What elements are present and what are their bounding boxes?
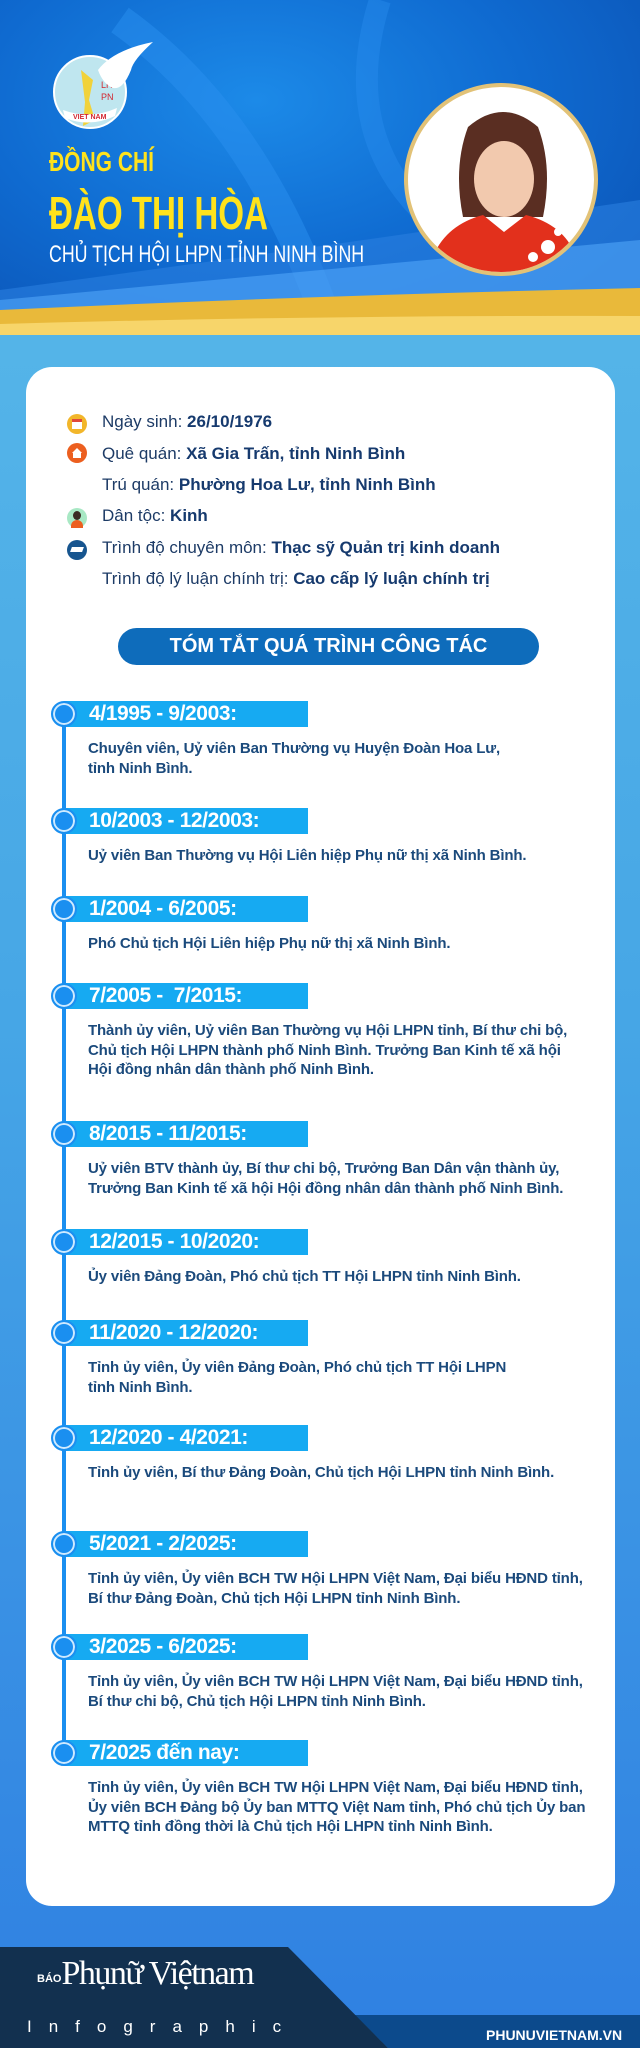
header banner: [0, 0, 640, 335]
info: ethnicity: Dân tộc: Kinh: [102, 506, 208, 525]
timeline item 10: Bí thư chi bộ, Chủ tịch Hội LHPN tỉnh Ninh Bình.: [88, 1692, 426, 1710]
footer infographic label: Infographic: [27, 2017, 298, 2036]
icon: graduation cap: [67, 540, 87, 560]
timeline line: [62, 714, 66, 1754]
info: politics: Trình độ lý luận chính trị: Cao cấp lý luận chính trị: [102, 569, 490, 588]
timeline item 1: Chuyên viên, Uỷ viên Ban Thường vụ Huyện Đoàn Hoa Lư,: [88, 740, 500, 757]
main white card: [26, 367, 615, 1906]
timeline item 10: Tỉnh ủy viên, Ủy viên BCH TW Hội LHPN Việt Nam, Đại biểu HĐND tỉnh,: [88, 1673, 583, 1690]
timeline item 11: Tỉnh ủy viên, Ủy viên BCH TW Hội LHPN Việt Nam, Đại biểu HĐND tỉnh,: [88, 1779, 583, 1796]
timeline item 6: Ủy viên Đảng Đoàn, Phó chủ tịch TT Hội LHPN tỉnh Ninh Bình.: [88, 1268, 521, 1285]
info: education: Trình độ chuyên môn: Thạc sỹ Quản trị kinh doanh: [102, 538, 500, 557]
timeline item 1: 4/1995 - 9/2003:: [89, 702, 237, 725]
logo: PN: [101, 92, 114, 102]
timeline item 4: Hội đồng nhân dân thành phố Ninh Bình.: [88, 1061, 374, 1078]
timeline item 5: 8/2015 - 11/2015:: [89, 1122, 247, 1145]
section heading pill: TÓM TẮT QUÁ TRÌNH CÔNG TÁC: [170, 635, 487, 657]
timeline item 10: [51, 1634, 583, 1710]
timeline item 7: Tỉnh ủy viên, Ủy viên Đảng Đoàn, Phó chủ tịch TT Hội LHPN: [88, 1359, 506, 1376]
subtitle: CHỦ TỊCH HỘI LHPN TỈNH NINH BÌNH: [49, 241, 364, 268]
timeline item 3: Phó Chủ tịch Hội Liên hiệp Phụ nữ thị xã Ninh Bình.: [88, 935, 450, 952]
logo: [53, 42, 153, 129]
timeline item 3: 1/2004 - 6/2005:: [89, 897, 237, 920]
timeline item 5: Trưởng Ban Kinh tế xã hội Hội đồng nhân dân thành phố Ninh Bình.: [88, 1180, 563, 1196]
timeline item 11: [51, 1740, 585, 1835]
footer logo: BÁOPhụnữ Việtnam: [37, 1955, 253, 1992]
timeline item 1: tỉnh Ninh Bình.: [88, 760, 192, 776]
section heading pill: [118, 628, 539, 665]
timeline item 11: Ủy viên BCH Đảng bộ Ủy ban MTTQ Việt Nam tỉnh, Phó chủ tịch Ủy ban: [88, 1798, 585, 1816]
timeline item 8: 12/2020 - 4/2021:: [89, 1426, 248, 1449]
icon: person: [67, 508, 87, 528]
portrait: [404, 83, 598, 276]
footer: [0, 1947, 640, 2048]
timeline item 9: Bí thư Đảng Đoàn, Chủ tịch Hội LHPN tỉnh Ninh Bình.: [88, 1590, 460, 1606]
timeline item 9: Tỉnh ủy viên, Ủy viên BCH TW Hội LHPN Việt Nam, Đại biểu HĐND tỉnh,: [88, 1570, 583, 1587]
timeline item 2: 10/2003 - 12/2003:: [89, 809, 259, 832]
timeline item 11: 7/2025 đến nay:: [89, 1741, 239, 1764]
timeline item 2: Uỷ viên Ban Thường vụ Hội Liên hiệp Phụ nữ thị xã Ninh Bình.: [88, 847, 526, 864]
footer website: PHUNUVIETNAM.VN: [486, 2027, 622, 2043]
timeline item 7: [51, 1320, 506, 1396]
timeline item 5: Uỷ viên BTV thành ủy, Bí thư chi bộ, Trưởng Ban Dân vận thành ủy,: [88, 1160, 559, 1177]
timeline item 2: [51, 808, 526, 864]
info: residence: Trú quán: Phường Hoa Lư, tỉnh Ninh Bình: [102, 475, 436, 494]
info: birth date: Ngày sinh: 26/10/1976: [102, 412, 272, 431]
logo: LH: [101, 80, 113, 90]
timeline item 6: 12/2015 - 10/2020:: [89, 1230, 259, 1253]
timeline item 7: tỉnh Ninh Bình.: [88, 1378, 192, 1396]
timeline item 9: 5/2021 - 2/2025:: [89, 1532, 237, 1555]
icon: calendar: [67, 414, 87, 434]
timeline item 4: Thành ủy viên, Uỷ viên Ban Thường vụ Hội LHPN tỉnh, Bí thư chi bộ,: [88, 1022, 567, 1039]
timeline item 1: [51, 701, 500, 776]
timeline item 11: MTTQ tỉnh đồng thời là Chủ tịch Hội LHPN tỉnh Ninh Bình.: [88, 1818, 493, 1835]
timeline item 9: [51, 1531, 583, 1606]
info: ethnicity: [67, 506, 208, 528]
timeline item 4: Chủ tịch Hội LHPN thành phố Ninh Bình. Trưởng Ban Kinh tế xã hội: [88, 1042, 561, 1058]
timeline item 8: Tỉnh ủy viên, Bí thư Đảng Đoàn, Chủ tịch Hội LHPN tỉnh Ninh Bình.: [88, 1464, 554, 1481]
timeline item 6: [51, 1229, 521, 1285]
timeline item 4: 7/2005 - 7/2015:: [89, 984, 242, 1007]
logo: VIET NAM: [73, 114, 107, 121]
title: name: ĐÀO THỊ HÒA: [49, 187, 268, 239]
timeline item 10: 3/2025 - 6/2025:: [89, 1635, 237, 1658]
timeline item 5: [51, 1121, 563, 1196]
title: đồng chí: ĐỒNG CHÍ: [49, 146, 154, 177]
icon: house: [67, 443, 87, 463]
timeline item 4: [51, 983, 567, 1078]
info: hometown: Quê quán: Xã Gia Trấn, tỉnh Ninh Bình: [102, 444, 405, 463]
timeline item 3: [51, 896, 450, 952]
timeline item 8: [51, 1425, 554, 1481]
timeline item 7: 11/2020 - 12/2020:: [89, 1321, 258, 1344]
